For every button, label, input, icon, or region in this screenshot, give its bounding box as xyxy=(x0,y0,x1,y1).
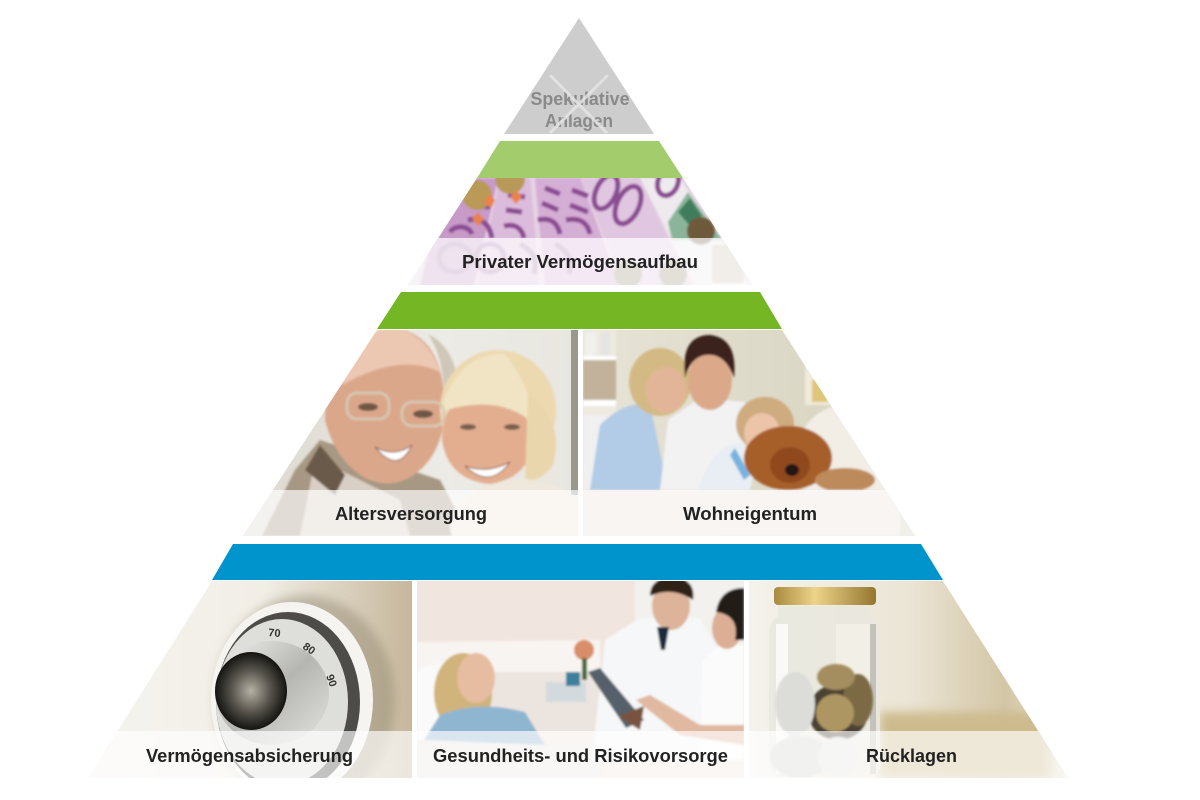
photo: family with dog xyxy=(583,330,918,536)
label: Wohneigentum: Wohneigentum xyxy=(683,504,817,524)
tier: speculative investments xyxy=(504,18,654,134)
band: blue xyxy=(212,544,943,580)
gray triangle xyxy=(504,18,654,134)
band: mid green xyxy=(377,292,782,329)
label: Gesundheits- und Risikovorsorge: Gesundheits- und Risikovorsorge xyxy=(433,746,728,766)
translucent caption strip xyxy=(417,731,744,778)
photo: safe dial: 80 xyxy=(300,641,317,657)
translucent caption strip xyxy=(400,238,760,286)
photo: coin jar xyxy=(749,581,1069,778)
crossed-out mark xyxy=(550,75,608,133)
photo: safe dial xyxy=(118,581,412,778)
photo: safe dial: 90 xyxy=(323,673,339,689)
photo: euro banknotes xyxy=(408,178,752,285)
label: Spekulative Anlagen: Spekulative xyxy=(530,89,630,109)
label: Rücklagen: Rücklagen xyxy=(866,746,957,766)
band: light green xyxy=(477,141,683,178)
translucent caption strip xyxy=(749,731,1069,778)
translucent caption strip xyxy=(583,490,918,536)
tier: retirement provision xyxy=(243,330,578,536)
tier: health and risk provision xyxy=(417,578,744,778)
label: Privater Vermögensaufbau: Privater Vermögensaufbau xyxy=(462,252,698,272)
label: Spekulative Anlagen: Anlagen xyxy=(545,111,613,131)
translucent caption strip xyxy=(80,731,415,778)
tier: private wealth building xyxy=(408,178,752,285)
photo: patient and doctors xyxy=(417,578,744,778)
label: Vermögensabsicherung: Vermögensabsicherung xyxy=(146,746,353,766)
photo: older couple xyxy=(243,330,578,536)
pyramid infographic xyxy=(118,18,1068,778)
translucent caption strip xyxy=(240,490,580,536)
tier: asset protection xyxy=(118,581,412,778)
tier: home ownership xyxy=(583,330,918,536)
glass jar body xyxy=(769,618,880,771)
photo: safe dial: 70 xyxy=(268,627,281,640)
tier: reserves xyxy=(749,581,1069,778)
label: Altersversorgung: Altersversorgung xyxy=(335,504,487,524)
